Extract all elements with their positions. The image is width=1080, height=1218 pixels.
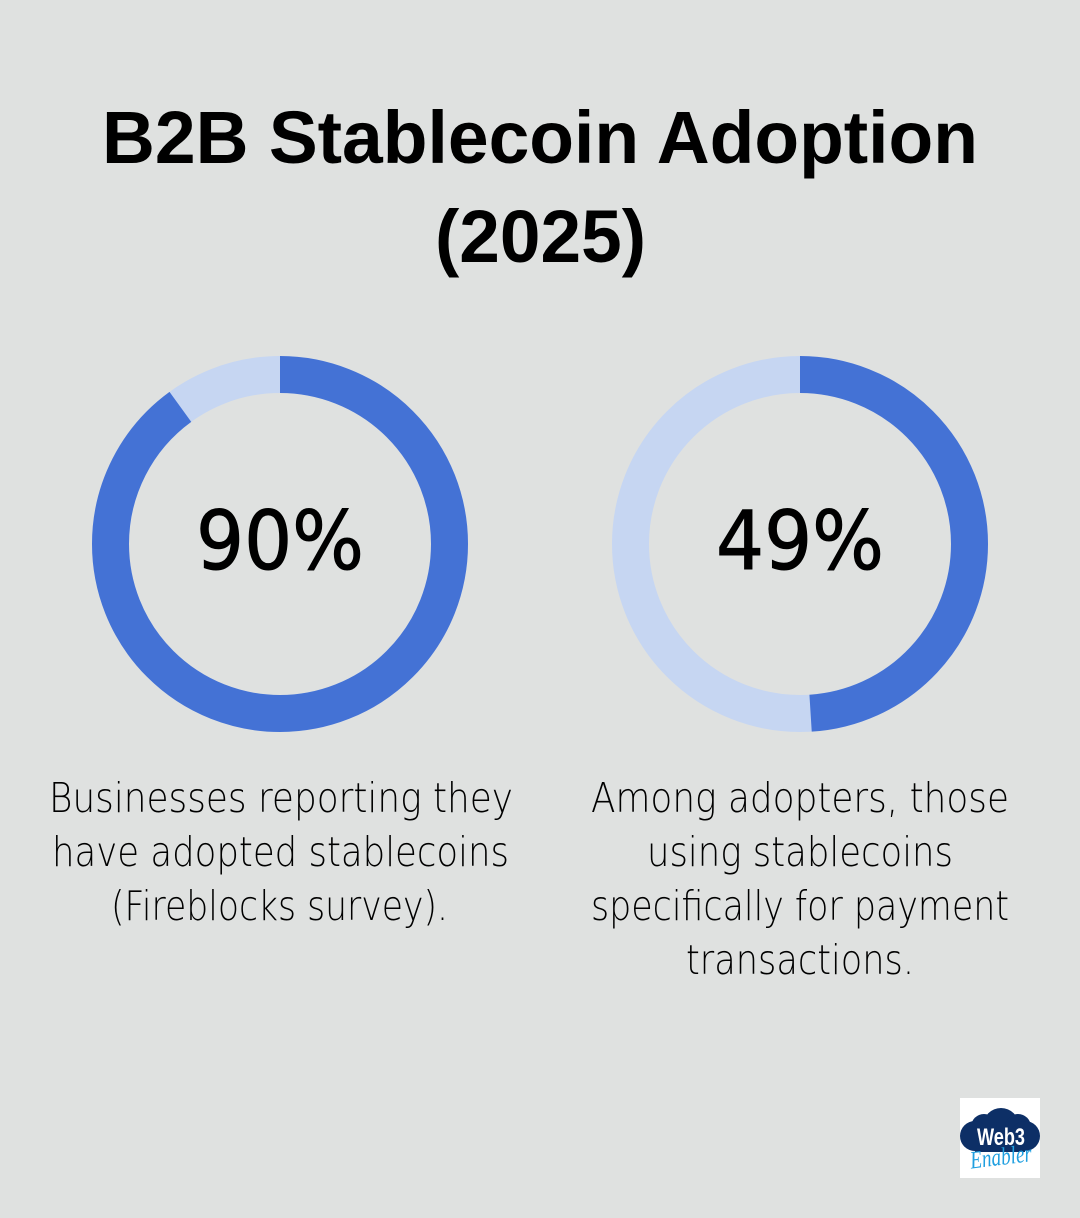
panel: 49% payments (591, 374, 1009, 984)
donut chart: 90% (110, 374, 450, 714)
donut chart: 49% (630, 374, 970, 714)
logo wordmark (968, 1124, 1034, 1175)
description: businesses adopted (49, 774, 513, 930)
description: payment transactions: Among adopters, those (591, 774, 1009, 822)
description: businesses adopted: have adopted stablecoins (52, 828, 509, 876)
description: payment transactions: using stablecoins (647, 828, 953, 876)
value: 90%: 90% (196, 495, 364, 589)
description: payment transactions: transactions. (686, 936, 914, 984)
description: businesses adopted: Businesses reporting they (49, 774, 513, 822)
panel: 90% adoption (49, 374, 513, 930)
description: payment transactions: specifically for payment (591, 882, 1009, 930)
title (102, 96, 978, 278)
logo: Web3 Enabler (960, 1098, 1040, 1178)
value: 49%: 49% (716, 495, 884, 589)
description: businesses adopted: (Fireblocks survey). (111, 882, 448, 930)
logo wordmark: Web3 (977, 1124, 1025, 1151)
icon: cloud (960, 1108, 1040, 1152)
logo wordmark: Enabler (968, 1140, 1034, 1175)
description: payment transactions (591, 774, 1009, 984)
title: (2025) (435, 195, 646, 278)
title: B2B Stablecoin Adoption (102, 96, 978, 179)
